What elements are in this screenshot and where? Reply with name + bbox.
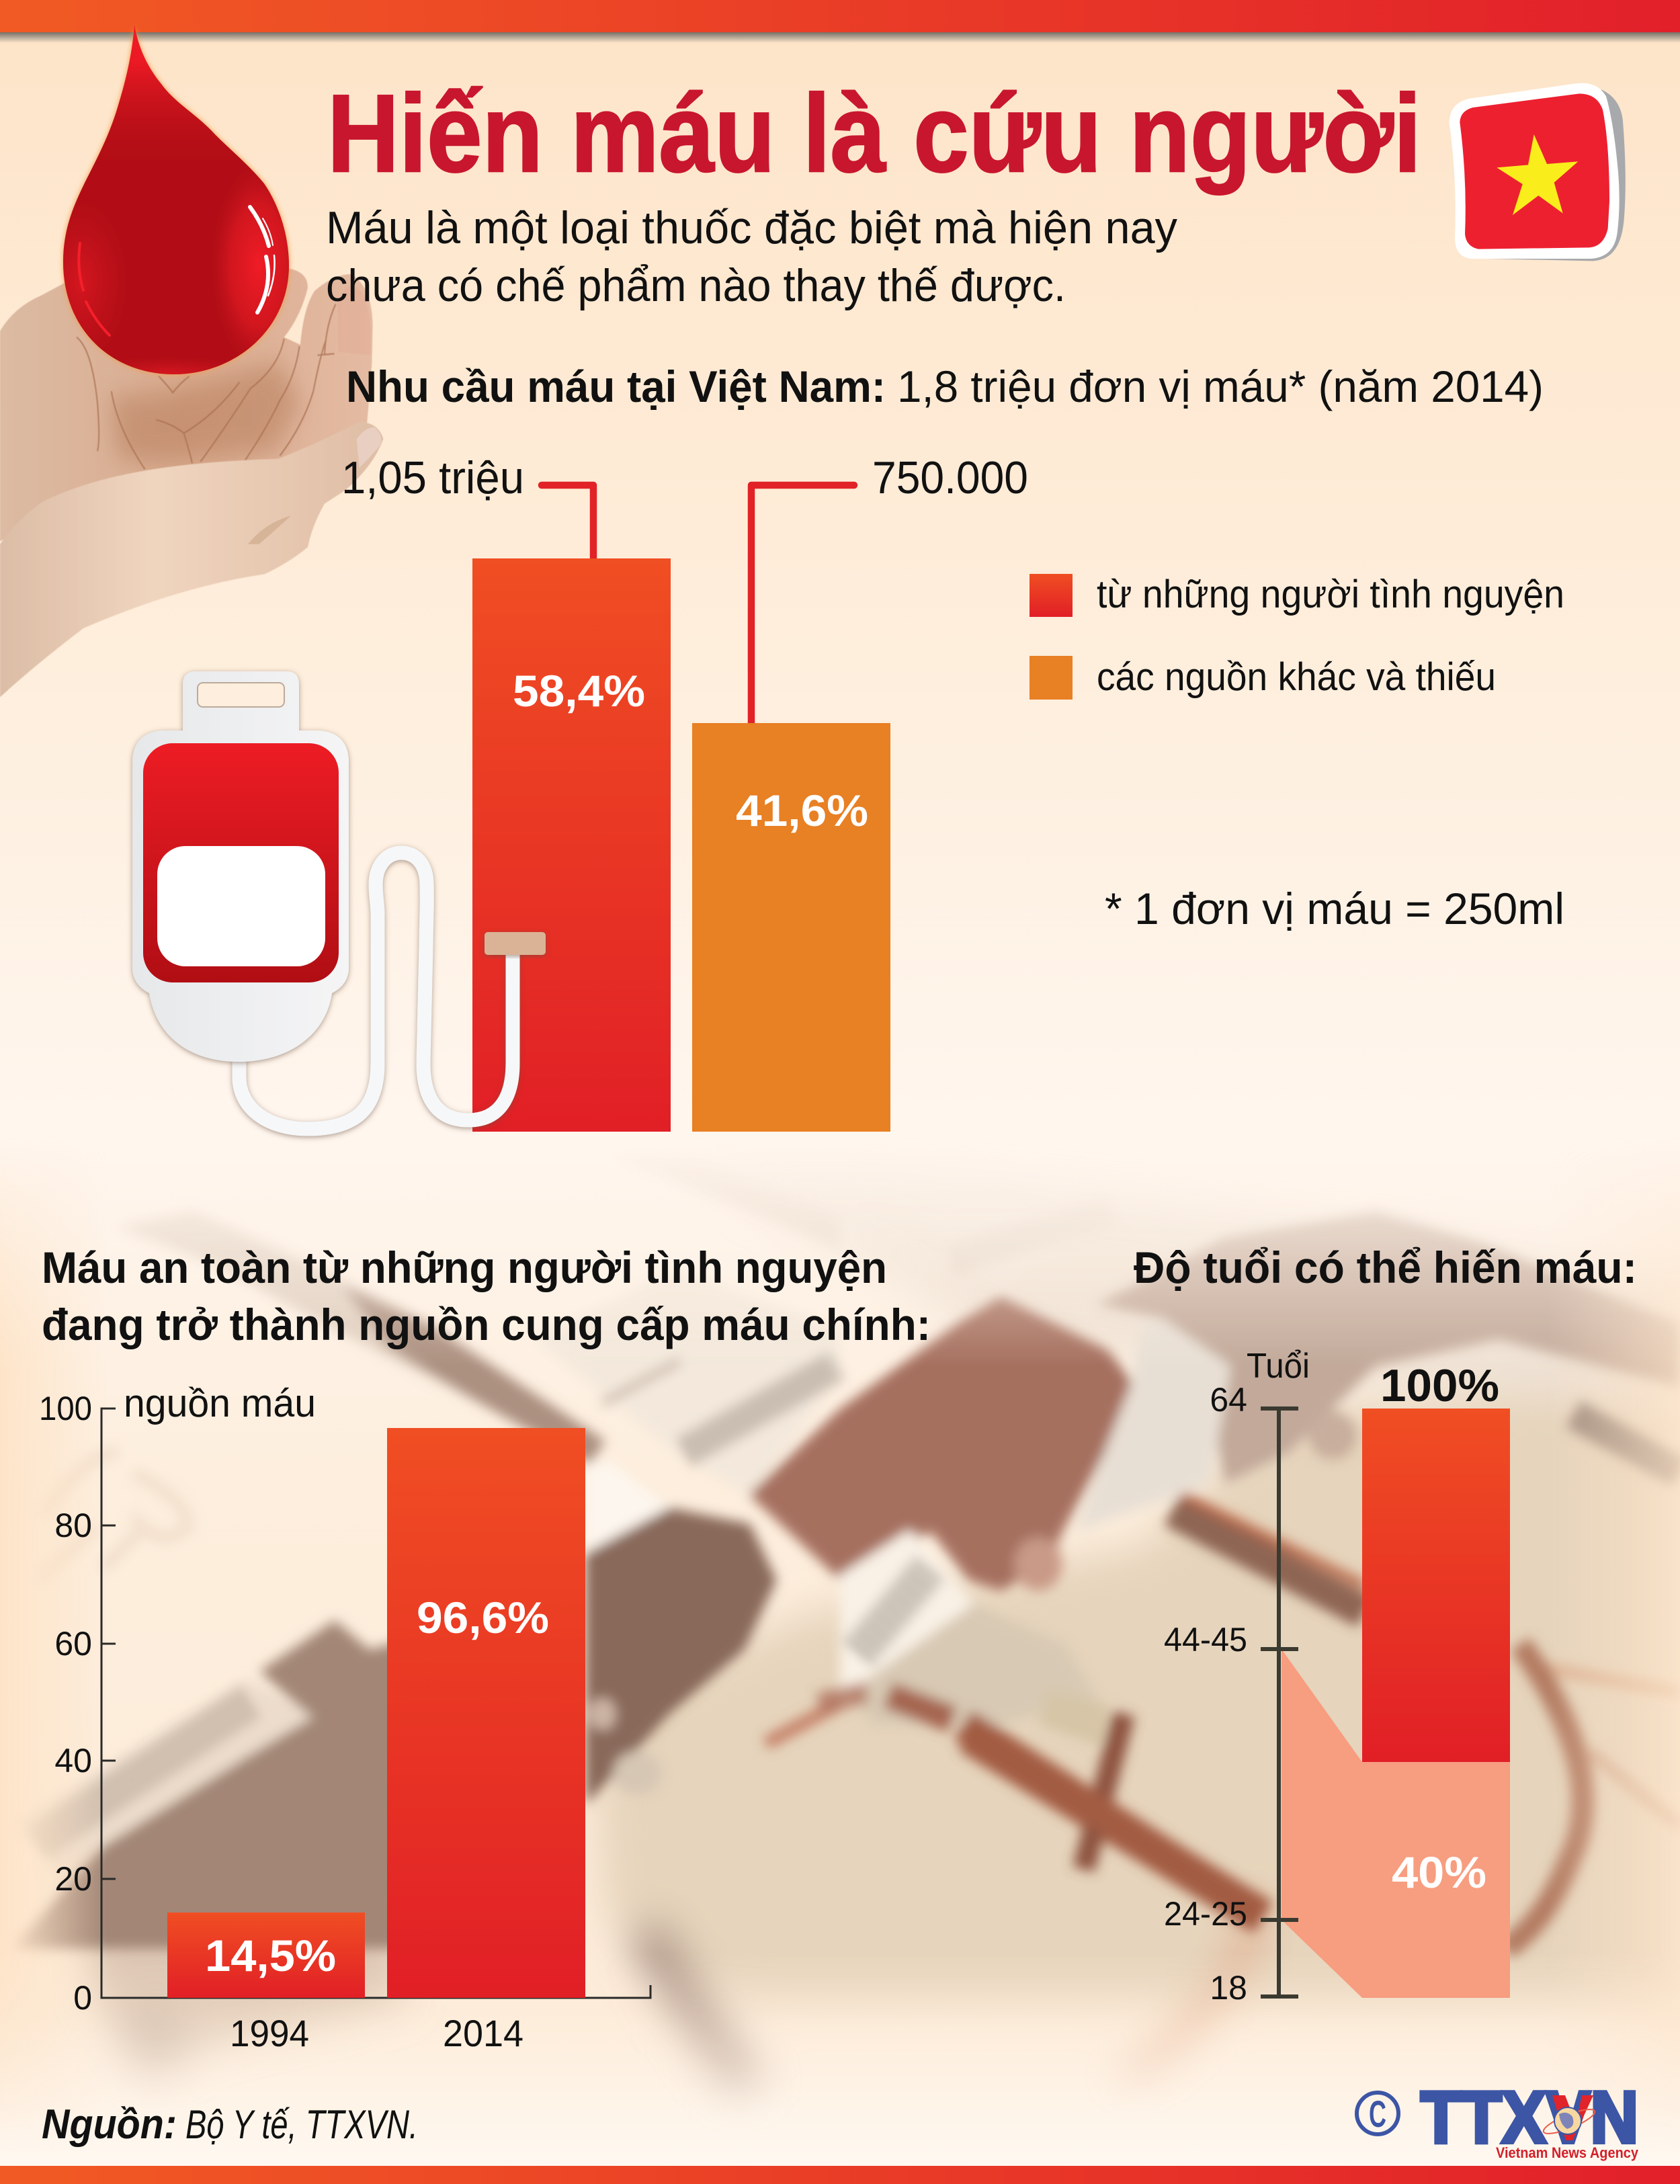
legend: các nguồn khác và thiếu	[1097, 655, 1496, 699]
chart: donor age range: 40%	[1392, 1847, 1486, 1897]
chart: donor age range: 24-25	[1164, 1895, 1247, 1933]
logo: TTXVN: Vietnam News Agency	[1496, 2144, 1639, 2161]
heading: donor age: Độ tuổi có thể hiến máu:	[1134, 1243, 1637, 1292]
label: 750.000 with connector: 750.000	[872, 452, 1028, 503]
source: Nguồn:	[42, 2101, 177, 2148]
bar chart: blood sources 1994 vs 2014: 60	[54, 1625, 92, 1663]
bar chart: blood sources 1994 vs 2014: 20	[54, 1860, 92, 1898]
bar chart: blood sources 1994 vs 2014	[39, 1382, 650, 2054]
chart: donor age range	[1164, 1347, 1510, 2007]
heading: safe blood	[42, 1243, 931, 1349]
logo: TTXVN: TTXVN	[1421, 2076, 1638, 2158]
source	[42, 2101, 418, 2148]
heading: safe blood: đang trở thành nguồn cung cấp máu chính:	[42, 1300, 931, 1349]
bar: volunteers 58,4%: 58,4%	[513, 666, 645, 716]
icon: blood bag with tube	[132, 671, 546, 1129]
source: Bộ Y tế, TTXVN.	[185, 2102, 418, 2147]
heading: demand: Nhu cầu máu tại Việt Nam:	[346, 362, 886, 411]
bar chart: blood sources 1994 vs 2014: 0	[73, 1979, 92, 2017]
subtitle	[326, 202, 1177, 311]
bar chart: blood sources 1994 vs 2014: 2014	[443, 2012, 523, 2054]
bar chart: blood sources 1994 vs 2014: 40	[54, 1742, 92, 1779]
chart: donor age range: 64	[1210, 1381, 1247, 1419]
bar chart: blood sources 1994 vs 2014: 1994	[230, 2012, 309, 2054]
icon: Vietnam flag	[1450, 83, 1626, 261]
blood drop	[59, 26, 293, 378]
bar: volunteers 58,4%	[472, 558, 671, 1132]
heading: safe blood: Máu an toàn từ những người tình nguyện	[42, 1243, 887, 1292]
chart: donor age range: 100%	[1380, 1360, 1499, 1411]
label: 1,05 million with connector	[341, 452, 593, 558]
hand	[0, 268, 383, 697]
bar chart: blood sources 1994 vs 2014: nguồn máu	[124, 1382, 316, 1425]
heading: demand	[346, 362, 1544, 411]
bar: other sources 41,6%: 41,6%	[736, 786, 868, 835]
bar chart: blood sources 1994 vs 2014: 14,5%	[205, 1931, 336, 1980]
bar chart: blood sources 1994 vs 2014: 96,6%	[417, 1593, 549, 1642]
chart: donor age range: Tuổi	[1247, 1347, 1310, 1386]
bar chart: blood sources 1994 vs 2014: 100	[39, 1390, 92, 1427]
subtitle: Máu là một loại thuốc đặc biệt mà hiện nay	[326, 202, 1177, 253]
label: 750.000 with connector	[751, 452, 1028, 723]
subtitle: chưa có chế phẩm nào thay thế được.	[326, 260, 1066, 311]
background photo: blurred blood bags	[0, 1181, 1680, 2104]
logo: TTXVN	[1357, 2076, 1639, 2161]
top bar	[0, 0, 1680, 43]
bar chart: blood sources 1994 vs 2014: 80	[54, 1507, 92, 1544]
legend	[1030, 573, 1564, 700]
bottom bar	[0, 2166, 1680, 2184]
title: Hiến máu là cứu người	[327, 72, 1421, 195]
legend: từ những người tình nguyện	[1097, 573, 1564, 616]
chart: donor age range: 44-45	[1164, 1621, 1247, 1658]
bar: other sources 41,6%	[692, 723, 890, 1132]
note: unit: * 1 đơn vị máu = 250ml	[1105, 884, 1564, 933]
logo: TTXVN: C	[1369, 2093, 1386, 2135]
chart: donor age range: 18	[1210, 1969, 1247, 2007]
label: 1,05 million with connector: 1,05 triệu	[341, 452, 524, 503]
heading: demand: 1,8 triệu đơn vị máu* (năm 2014)	[897, 362, 1544, 411]
